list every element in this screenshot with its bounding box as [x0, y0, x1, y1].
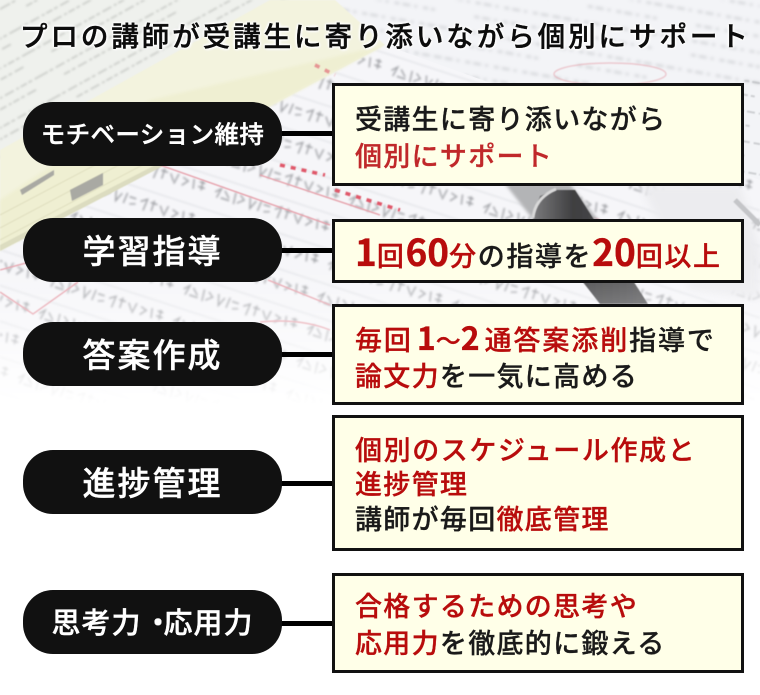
pen [505, 184, 600, 222]
pill: instruction: 学習指導 [82, 225, 222, 273]
box: progress management detail [332, 415, 744, 551]
box: thinking detail: 合格するための思考や [355, 585, 638, 624]
right side paper [740, 80, 760, 320]
pill: progress management: 進捗管理 [82, 457, 222, 505]
connector: motivation [272, 131, 334, 136]
pill: motivation: モチベーション維持 [41, 116, 264, 151]
top-right blurred writing [335, 0, 760, 85]
connector: instruction [272, 248, 334, 253]
handwriting notebook page [0, 45, 760, 420]
fade out [0, 255, 760, 405]
pill: answer writing: 答案作成 [82, 329, 222, 377]
box: thinking detail: 応用力を徹底的に鍛える [355, 622, 666, 661]
box: motivation detail: 受講生に寄り添いながら [355, 98, 666, 137]
box: thinking detail [332, 573, 744, 673]
pill: motivation [23, 102, 282, 166]
box: progress management detail: 講師が毎回徹底管理 [355, 498, 610, 537]
red correction lines [0, 63, 666, 330]
pill: thinking and application: 思考力 応用力 [51, 600, 254, 642]
box: answer writing detail: 毎回1～2通答案添削指導で [355, 314, 716, 360]
pill: answer writing [23, 322, 282, 386]
box: answer writing detail: 論文力を一気に高める [355, 355, 638, 394]
title: プロの講師が受講生に寄り添いながら個別にサポート [20, 14, 751, 54]
top-left printed page [0, 0, 290, 160]
book [0, 0, 385, 250]
box: answer writing detail [332, 304, 744, 405]
box: instruction detail: 1回60分の指導を20回以上 [355, 223, 722, 277]
box: progress management detail: 個別のスケジュール作成と [355, 429, 696, 468]
right paper sheet [640, 184, 760, 300]
box: progress management detail: 進捗管理 [355, 463, 468, 502]
box: motivation detail: 個別にサポート [355, 135, 553, 174]
connector: answer writing [272, 352, 334, 357]
connector: thinking [272, 621, 334, 626]
pill: instruction [23, 218, 282, 282]
pill: thinking and application: ・ [144, 600, 173, 642]
paper base [0, 0, 760, 420]
box: motivation detail [332, 83, 744, 186]
pill: thinking and application [23, 590, 282, 654]
pill: progress management [23, 450, 282, 514]
connector: progress [272, 481, 334, 486]
